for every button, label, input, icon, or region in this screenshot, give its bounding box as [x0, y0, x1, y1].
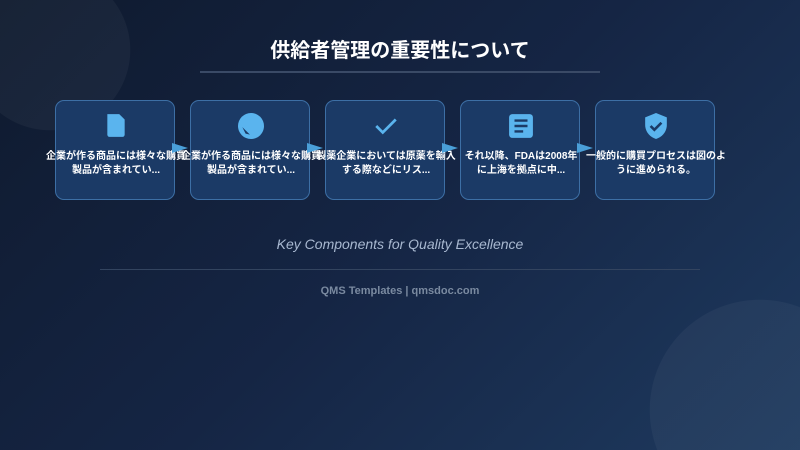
text 5: うに進められる。 — [616, 165, 696, 176]
text 3: する際などにリス... — [342, 165, 430, 176]
text 1: 製品が含まれてい... — [72, 165, 160, 176]
card 5 — [595, 100, 715, 200]
text 4: それ以降、FDAは2008年 — [465, 151, 577, 162]
text 4: に上海を拠点に中... — [477, 165, 565, 176]
subtitle: Key Components for Quality Excellence — [277, 236, 523, 252]
arrow 3 — [442, 143, 458, 153]
card 3 — [325, 100, 445, 200]
arrow 4 — [577, 143, 593, 153]
icon: note — [509, 114, 533, 138]
card 1 — [55, 100, 175, 200]
card 4 — [460, 100, 580, 200]
text 2: 製品が含まれてい... — [207, 165, 295, 176]
text 1: 企業が作る商品には様々な購買 — [46, 151, 186, 162]
icon: document — [107, 114, 125, 137]
text 5 — [586, 150, 726, 176]
text 3 — [316, 150, 456, 176]
card 2 — [190, 100, 310, 200]
text 1 — [46, 150, 186, 176]
footer: QMS Templates | qmsdoc.com — [321, 285, 479, 297]
text 5: 一般的に購買プロセスは図のよ — [586, 151, 726, 162]
text 2 — [181, 150, 321, 176]
arrow 1 — [172, 143, 188, 153]
title: 供給者管理の重要性について — [270, 40, 530, 62]
text 3: 製薬企業においては原薬を輸入 — [316, 151, 456, 162]
icon: circle — [238, 113, 264, 139]
icon: check — [375, 118, 397, 134]
text 2: 企業が作る商品には様々な購買 — [181, 151, 321, 162]
arrow 2 — [307, 143, 323, 153]
icon: shield — [645, 113, 667, 139]
text 4 — [465, 150, 577, 176]
